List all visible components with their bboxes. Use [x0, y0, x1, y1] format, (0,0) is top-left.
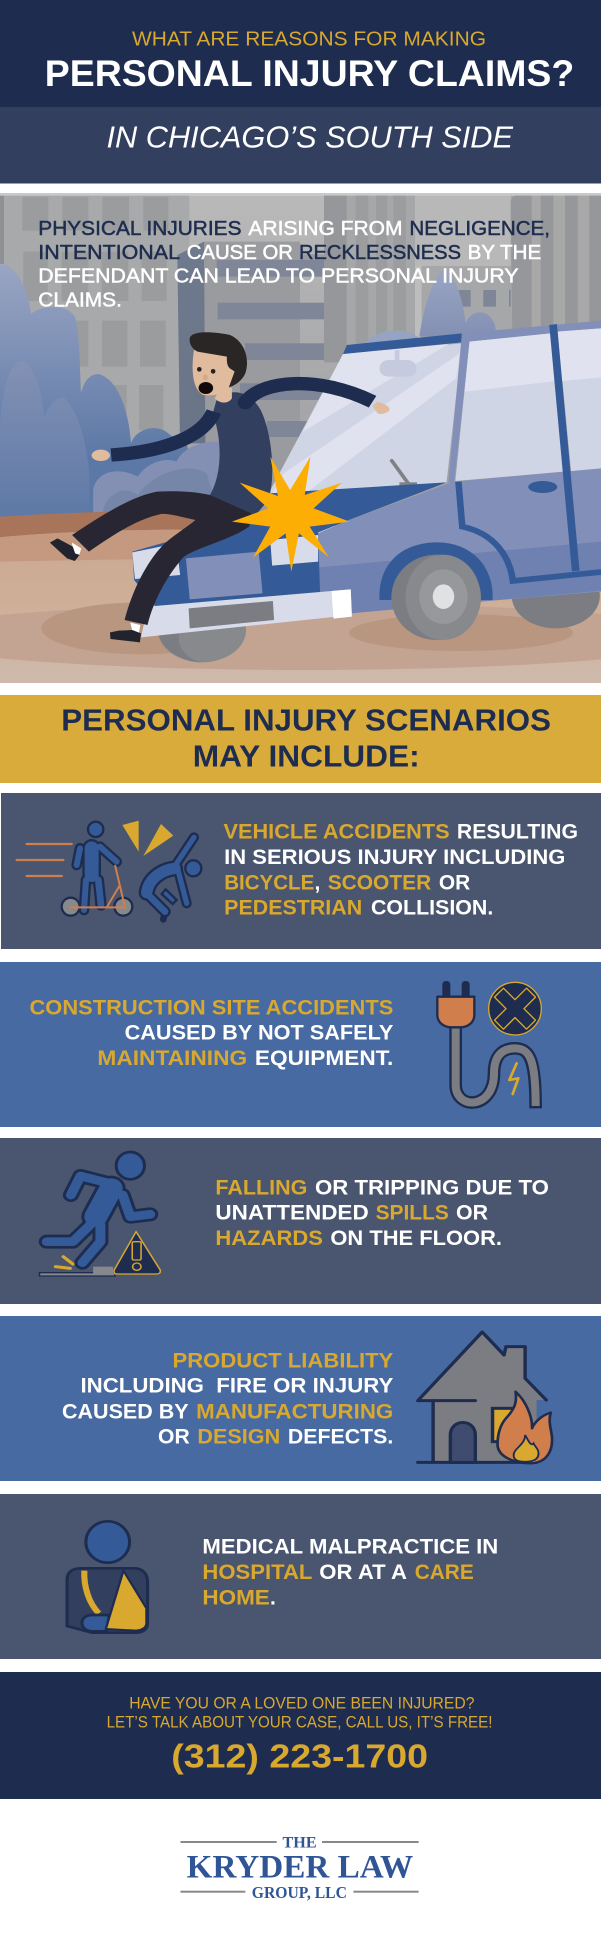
vehicle accidents text: OR	[439, 872, 470, 895]
vehicle accidents text: IN SERIOUS INJURY INCLUDING	[224, 846, 565, 869]
icon: house on fire	[418, 1332, 552, 1463]
panel: falling or tripping	[0, 1138, 601, 1304]
front bush cluster	[93, 442, 220, 512]
section heading: PERSONAL INJURY SCENARIOS	[61, 703, 551, 738]
product liability text: CAUSED BY	[62, 1400, 189, 1423]
panel: car accident illustration	[0, 193, 601, 687]
footer call to action: LET’S TALK ABOUT YOUR CASE, CALL US, IT’S FREE!	[107, 1712, 492, 1731]
construction text	[30, 996, 393, 1070]
construction text: CONSTRUCTION SITE ACCIDENTS	[30, 996, 393, 1019]
background buildings left	[0, 196, 302, 448]
panel: construction site accidents	[0, 962, 601, 1127]
intro paragraph: RECKLESSNESS	[299, 241, 461, 264]
intro paragraph: ARISING FROM	[248, 217, 402, 240]
falling text: ON THE FLOOR.	[330, 1227, 502, 1250]
bushes left	[0, 264, 188, 517]
logo: The Kryder Law Group: KRYDER LAW	[187, 1849, 413, 1885]
falling text: UNATTENDED	[215, 1201, 369, 1224]
section heading band: MAY INCLUDE:	[193, 739, 420, 774]
medical text: HOME	[202, 1587, 270, 1610]
falling text: HAZARDS	[215, 1227, 323, 1250]
footer call to action	[0, 1672, 601, 1799]
icon: scooter collision	[17, 821, 201, 919]
vehicle accidents text	[224, 821, 578, 920]
intro paragraph: PHYSICAL INJURIES	[38, 217, 241, 240]
product liability text: PRODUCT LIABILITY	[172, 1350, 393, 1373]
falling text	[215, 1176, 549, 1250]
intro paragraph	[38, 217, 550, 312]
intro paragraph: CAUSE OR	[187, 241, 293, 264]
product liability text: DEFECTS.	[288, 1425, 393, 1448]
vehicle accidents text: SCOOTER	[328, 872, 431, 895]
vehicle accidents text: BICYCLE	[224, 872, 314, 895]
construction text: MAINTAINING	[97, 1047, 247, 1070]
product liability text: DESIGN	[197, 1425, 280, 1448]
falling text: FALLING	[215, 1176, 307, 1199]
car windshield and roof	[268, 343, 462, 494]
panel: medical malpractice	[0, 1494, 601, 1659]
front wheel	[158, 626, 246, 662]
side windows	[455, 333, 563, 481]
vehicle accidents text: COLLISION.	[371, 897, 493, 920]
subtitle: IN CHICAGO’S SOUTH SIDE	[106, 121, 514, 155]
background bushes right	[419, 270, 497, 337]
medical text: OR AT A	[319, 1561, 407, 1584]
call to action text: HAVE YOU OR A LOVED ONE BEEN INJURED?	[129, 1693, 474, 1712]
construction text: EQUIPMENT.	[255, 1047, 393, 1070]
vehicle accidents text: RESULTING	[457, 821, 578, 844]
medical text: CARE	[415, 1561, 474, 1584]
background buildings right	[300, 196, 601, 437]
ground	[0, 512, 196, 538]
panel: product liability	[0, 1316, 601, 1481]
vehicle accidents text: ,	[314, 872, 320, 895]
logo: The Kryder Law Group: GROUP, LLC	[252, 1883, 347, 1902]
main scene in car coordinates	[0, 321, 601, 687]
product liability text: OR	[158, 1425, 190, 1448]
icon: damaged plug	[437, 977, 547, 1108]
header band	[0, 0, 601, 107]
intro paragraph: BY THE	[468, 241, 541, 264]
intro paragraph: CLAIMS.	[38, 289, 122, 312]
product liability text: INCLUDING FIRE OR INJURY	[80, 1375, 393, 1398]
product liability text	[62, 1350, 393, 1448]
main title: PERSONAL INJURY CLAIMS?	[45, 53, 574, 94]
medical text: .	[270, 1587, 276, 1610]
vehicle accidents text: PEDESTRIAN	[224, 897, 362, 920]
hood and front	[132, 482, 447, 608]
section heading band	[0, 695, 601, 783]
kicker line: WHAT ARE REASONS FOR MAKING	[132, 29, 486, 51]
phone number: (312) 223-1700	[171, 1737, 428, 1774]
falling text: OR TRIPPING DUE TO	[315, 1176, 549, 1199]
intro paragraph: INTENTIONAL	[38, 241, 180, 264]
medical text: MEDICAL MALPRACTICE IN	[202, 1535, 498, 1558]
subtitle band	[0, 107, 601, 184]
medical text	[202, 1535, 498, 1610]
product liability text: MANUFACTURING	[196, 1400, 393, 1423]
wiper	[392, 461, 408, 483]
intro paragraph: DEFENDANT CAN LEAD TO PERSONAL INJURY	[38, 265, 519, 288]
vehicle accidents text: VEHICLE ACCIDENTS	[224, 821, 450, 844]
wheel	[379, 542, 493, 600]
falling text: OR	[456, 1201, 488, 1224]
bumper	[141, 589, 352, 637]
falling text: SPILLS	[376, 1201, 449, 1224]
intro paragraph: NEGLIGENCE,	[409, 217, 550, 240]
logo: The Kryder Law Group	[180, 1835, 419, 1902]
panel: vehicle accidents	[1, 793, 601, 949]
rear wheel	[512, 592, 600, 628]
icon: person with arm sling	[67, 1521, 148, 1633]
man	[50, 332, 389, 642]
logo: The Kryder Law Group: THE	[282, 1835, 317, 1852]
medical text: HOSPITAL	[202, 1561, 313, 1584]
construction text: CAUSED BY NOT SAFELY	[125, 1021, 393, 1044]
impact star	[232, 457, 350, 572]
icon: tripping person with warning	[39, 1152, 160, 1276]
car body	[318, 468, 601, 615]
